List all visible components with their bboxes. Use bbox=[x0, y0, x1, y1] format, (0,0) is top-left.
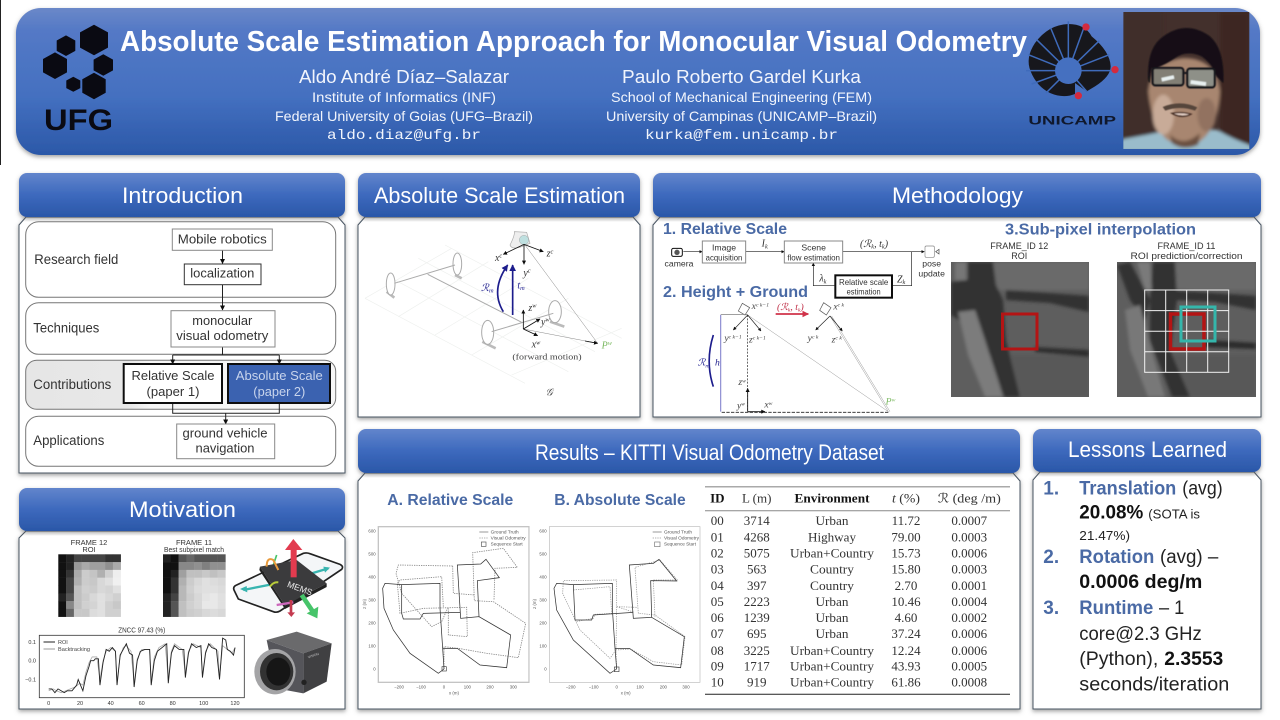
table: KITTI sequences: 4268 bbox=[744, 530, 770, 544]
diagram: vehicle and camera geometry: y bbox=[523, 268, 528, 279]
table: KITTI sequences: 11.72 bbox=[892, 513, 920, 528]
chart: absolute scale trajectory: 0 bbox=[544, 667, 547, 672]
line chart: ZNCC: 100 bbox=[199, 701, 208, 707]
flow diagram: relative scale pipeline: Z bbox=[897, 274, 903, 285]
flow diagram: relative scale pipeline: Scene bbox=[801, 242, 826, 252]
image: frame 12 ROI: ROI bbox=[82, 545, 96, 554]
chart: absolute scale trajectory: 500 bbox=[539, 552, 547, 557]
image: frame 12 ROI with red box bbox=[951, 241, 1089, 397]
table: KITTI sequences: 07 bbox=[711, 626, 724, 641]
icon: industrial camera bbox=[254, 632, 332, 694]
flow diagram: relative scale pipeline: ) bbox=[884, 239, 889, 250]
table: KITTI sequences: 695 bbox=[747, 626, 766, 641]
diagram: vehicle and camera geometry: c bbox=[551, 248, 554, 255]
flow diagram: relative scale pipeline: acquisition bbox=[706, 252, 742, 262]
line chart: ZNCC: 80 bbox=[170, 701, 176, 707]
diagram: vehicle and camera geometry: P bbox=[602, 340, 608, 351]
line chart: ZNCC: 60 bbox=[139, 701, 145, 707]
chart: relative scale trajectory: 300 bbox=[510, 684, 518, 689]
chart: absolute scale trajectory bbox=[532, 527, 700, 695]
heading: introduction bbox=[19, 173, 345, 217]
table: KITTI sequences: 5075 bbox=[744, 546, 770, 560]
table: KITTI sequences: 12.24 bbox=[891, 643, 921, 658]
table: KITTI sequences: 0.0006 bbox=[951, 626, 988, 641]
chart: relative scale trajectory: −100 bbox=[416, 684, 426, 689]
author block: Aldo: aldo.diaz@ufg.br bbox=[327, 128, 481, 144]
list item: runtime: – 1 bbox=[1159, 598, 1184, 619]
table: KITTI sequences: 37.24 bbox=[891, 626, 921, 641]
diagram: camera height over ground: c k bbox=[838, 303, 845, 309]
flow diagram: relative scale pipeline bbox=[665, 239, 945, 298]
heading: introduction: Introduction bbox=[122, 183, 243, 208]
table: KITTI sequences: 2.70 bbox=[895, 578, 917, 593]
chart: relative scale trajectory: Visual Odometry bbox=[491, 535, 527, 540]
author block: Aldo bbox=[275, 67, 533, 144]
table: KITTI sequences: 0.0008 bbox=[951, 674, 987, 690]
diagram: vehicle and camera geometry: m bbox=[520, 285, 525, 292]
table: KITTI sequences: 03 bbox=[711, 562, 724, 576]
subheading: absolute scale plot: B. Absolute Scale bbox=[554, 492, 686, 509]
image: frame 12 ROI with red box: FRAME_ID 12 bbox=[990, 241, 1048, 251]
line chart: ZNCC: −0.1 bbox=[25, 678, 36, 684]
list item: translation bbox=[1043, 478, 1223, 543]
diagram: camera height over ground: w bbox=[892, 398, 896, 404]
flow diagram: relative scale pipeline: (ℛ bbox=[860, 239, 871, 250]
line chart: ZNCC: 120 bbox=[230, 701, 240, 707]
icon: MEMS sensor on phone bbox=[234, 539, 343, 618]
flow diagram: research overview: Applications bbox=[33, 433, 105, 448]
chart: relative scale trajectory: 200 bbox=[486, 684, 494, 689]
subheading: sub-pixel interpolation: 3.Sub-pixel interpolation bbox=[1005, 221, 1196, 238]
table: KITTI sequences: 2223 bbox=[744, 594, 770, 609]
table: KITTI sequences bbox=[705, 487, 1010, 694]
flow diagram: research overview: Relative Scale bbox=[132, 368, 214, 383]
flow diagram: relative scale pipeline: k bbox=[882, 244, 885, 251]
diagram: camera height over ground: P bbox=[886, 396, 892, 407]
subheading: relative scale: 1. Relative Scale bbox=[663, 221, 787, 238]
flow diagram: relative scale pipeline: , t bbox=[874, 239, 882, 250]
diagram: camera height over ground bbox=[698, 301, 896, 412]
speaker photo bbox=[1120, 12, 1253, 151]
flow diagram: relative scale pipeline: Relative scale bbox=[839, 277, 888, 287]
icon: MEMS sensor on phone: MEMS bbox=[286, 579, 314, 598]
panel: results bbox=[358, 429, 1020, 709]
diagram: vehicle and camera geometry: t bbox=[517, 280, 520, 291]
line chart: ZNCC: 20 bbox=[77, 701, 83, 707]
logo: UNICAMP: UNICAMP bbox=[1028, 114, 1116, 128]
diagram: vehicle and camera geometry: z bbox=[528, 303, 532, 314]
table: KITTI sequences: 02 bbox=[711, 546, 724, 560]
panel: methodology bbox=[653, 173, 1261, 417]
chart: absolute scale trajectory: 600 bbox=[539, 529, 547, 534]
image: frame 11 best match: Best subpixel match bbox=[164, 545, 224, 554]
table: KITTI sequences: 3714 bbox=[744, 513, 770, 528]
table: KITTI sequences: 00 bbox=[711, 513, 724, 528]
table: KITTI sequences: 4.60 bbox=[895, 610, 917, 625]
list item: rotation bbox=[1043, 547, 1219, 593]
list item: runtime: 2.3553 bbox=[1164, 649, 1223, 670]
table: KITTI sequences: 1239 bbox=[744, 610, 770, 625]
heading: methodology bbox=[653, 173, 1261, 217]
table: KITTI sequences: 0.0003 bbox=[951, 562, 987, 576]
flow diagram: relative scale pipeline: k bbox=[824, 278, 827, 285]
title: Absolute Scale Estimation Approach for Monocular Visual Odometry bbox=[120, 26, 1027, 58]
diagram: camera height over ground: x bbox=[764, 400, 769, 411]
heading: results bbox=[358, 429, 1020, 473]
line chart: ZNCC: ZNCC 97.43 (%) bbox=[118, 627, 165, 634]
logo: UFG bbox=[43, 25, 113, 137]
table: KITTI sequences: Highway bbox=[808, 530, 856, 544]
table: KITTI sequences: ℛ (deg /m) bbox=[938, 490, 1001, 506]
table: KITTI sequences: 15.80 bbox=[891, 562, 921, 576]
flow diagram: relative scale pipeline: update bbox=[918, 268, 945, 278]
table: KITTI sequences: 0.0006 bbox=[951, 643, 988, 658]
flow diagram: relative scale pipeline: λ bbox=[819, 274, 824, 285]
flow diagram: relative scale pipeline: k bbox=[871, 244, 874, 251]
table: KITTI sequences: 563 bbox=[747, 562, 766, 576]
image: frame 11 ROI prediction with grid: FRAME_ID 11 bbox=[1158, 241, 1216, 251]
chart: relative scale trajectory: 0 bbox=[443, 684, 446, 689]
icon: industrial camera: VISION bbox=[307, 652, 320, 659]
diagram: vehicle and camera geometry: ℛ bbox=[481, 283, 489, 294]
chart: absolute scale trajectory: 0 bbox=[615, 684, 618, 689]
flow diagram: research overview: Research field bbox=[34, 252, 118, 267]
list item: translation: 21.47%) bbox=[1079, 528, 1130, 543]
table: KITTI sequences: 0.0005 bbox=[951, 658, 987, 674]
heading: motivation: Motivation bbox=[129, 497, 236, 522]
heading: methodology: Methodology bbox=[892, 183, 1023, 208]
diagram: camera height over ground: ) bbox=[799, 302, 804, 313]
flow diagram: relative scale pipeline: k bbox=[903, 279, 906, 286]
chart: relative scale trajectory: 200 bbox=[368, 620, 376, 625]
table: KITTI sequences: 0.0002 bbox=[951, 610, 987, 625]
heading: lessons learned bbox=[1033, 429, 1261, 472]
logo: UFG: UFG bbox=[44, 104, 113, 137]
panel: motivation bbox=[19, 488, 345, 709]
chart: absolute scale trajectory: 100 bbox=[539, 643, 547, 648]
diagram: camera height over ground: y bbox=[724, 333, 729, 344]
diagram: vehicle and camera geometry: w bbox=[536, 339, 541, 346]
table: KITTI sequences: 1717 bbox=[744, 658, 770, 674]
chart: relative scale trajectory: z (m) bbox=[362, 599, 367, 609]
chart: absolute scale trajectory: Sequence Start bbox=[664, 541, 697, 546]
chart: absolute scale trajectory: −100 bbox=[589, 684, 599, 689]
flow diagram: relative scale pipeline: flow estimation bbox=[787, 252, 840, 262]
table: KITTI sequences: 15.73 bbox=[891, 546, 921, 560]
table: KITTI sequences: Urban+Country bbox=[790, 674, 875, 690]
table: KITTI sequences: Urban+Country bbox=[790, 658, 875, 674]
diagram: vehicle and camera geometry bbox=[365, 232, 622, 399]
list item: translation: 1. bbox=[1043, 478, 1059, 499]
list item: rotation: (avg) – bbox=[1160, 547, 1219, 568]
list item: rotation: 0.0006 deg/m bbox=[1079, 572, 1202, 593]
diagram: camera height over ground: c k bbox=[835, 336, 842, 342]
list item: runtime: 3. bbox=[1043, 598, 1059, 619]
table: KITTI sequences: 0.0004 bbox=[951, 594, 988, 609]
flow diagram: relative scale pipeline: k bbox=[765, 243, 768, 250]
heading: absolute scale estimation bbox=[358, 173, 640, 217]
image: frame 11 ROI prediction with grid bbox=[1117, 241, 1256, 397]
chart: absolute scale trajectory: Visual Odometry bbox=[664, 535, 700, 540]
flow diagram: relative scale pipeline: camera bbox=[665, 258, 694, 268]
table: KITTI sequences: 919 bbox=[747, 674, 766, 690]
header banner bbox=[16, 8, 1260, 155]
table: KITTI sequences: Urban bbox=[816, 513, 849, 528]
list item: runtime: Runtime bbox=[1079, 598, 1153, 619]
diagram: vehicle and camera geometry: z bbox=[547, 249, 551, 260]
chart: absolute scale trajectory: 400 bbox=[539, 575, 547, 580]
heading: motivation bbox=[19, 488, 345, 531]
line chart: ZNCC: Backtracking bbox=[58, 647, 90, 653]
table: KITTI sequences: Country bbox=[810, 562, 855, 576]
table: KITTI sequences: Country bbox=[810, 578, 855, 593]
diagram: camera height over ground: z bbox=[749, 334, 753, 345]
line chart: ZNCC: 0.0 bbox=[28, 659, 36, 665]
diagram: camera height over ground: c k−1 bbox=[729, 334, 742, 340]
diagram: vehicle and camera geometry: m bbox=[489, 288, 494, 295]
chart: absolute scale trajectory: 200 bbox=[539, 620, 547, 625]
diagram: vehicle and camera geometry: y bbox=[541, 317, 545, 328]
chart: absolute scale trajectory: −200 bbox=[566, 684, 576, 689]
table: KITTI sequences: 09 bbox=[711, 658, 724, 674]
chart: relative scale trajectory: 500 bbox=[368, 552, 376, 557]
diagram: camera height over ground: w bbox=[742, 378, 746, 384]
flow diagram: research overview: Mobile robotics bbox=[178, 231, 267, 246]
diagram: vehicle and camera geometry: x bbox=[532, 340, 536, 351]
diagram: camera height over ground: k bbox=[798, 308, 801, 314]
diagram: camera height over ground: x bbox=[752, 301, 756, 312]
panel: absolute scale estimation bbox=[358, 173, 640, 417]
diagram: camera height over ground: c k−1 bbox=[756, 302, 769, 308]
chart: relative scale trajectory: 400 bbox=[368, 575, 376, 580]
chart: relative scale trajectory: −200 bbox=[394, 684, 404, 689]
flow diagram: research overview: visual odometry bbox=[176, 328, 269, 343]
diagram: camera height over ground: y bbox=[808, 333, 812, 344]
table: KITTI sequences: 0.0001 bbox=[951, 578, 987, 593]
image: frame 11 best match bbox=[163, 538, 226, 617]
image: frame 12 ROI: FRAME 12 bbox=[71, 538, 107, 547]
table: KITTI sequences: 10 bbox=[711, 674, 724, 690]
diagram: camera height over ground: w bbox=[741, 402, 745, 408]
chart: absolute scale trajectory: 100 bbox=[636, 684, 644, 689]
author block: Paulo bbox=[606, 67, 877, 144]
list item: translation: (avg) bbox=[1182, 478, 1223, 499]
flow diagram: research overview: (paper 2) bbox=[253, 384, 305, 399]
chart: absolute scale trajectory: 300 bbox=[682, 684, 690, 689]
table: KITTI sequences: 0.0006 bbox=[951, 546, 988, 560]
flow diagram: relative scale pipeline: Image bbox=[712, 242, 736, 252]
table: KITTI sequences: 04 bbox=[711, 578, 724, 593]
heading: lessons learned: Lessons Learned bbox=[1068, 437, 1227, 462]
image: frame 11 best match: FRAME 11 bbox=[176, 538, 212, 547]
diagram: camera height over ground: z bbox=[738, 377, 742, 388]
diagram: camera height over ground: h bbox=[715, 358, 720, 369]
logo: UNICAMP bbox=[1026, 21, 1119, 128]
table: KITTI sequences: 61.86 bbox=[891, 674, 921, 690]
diagram: camera height over ground: x bbox=[833, 301, 838, 312]
table: KITTI sequences: Environment bbox=[794, 490, 870, 506]
diagram: vehicle and camera geometry: w bbox=[545, 317, 550, 324]
list item: runtime: (Python), bbox=[1079, 649, 1158, 670]
subheading: relative scale plot: A. Relative Scale bbox=[387, 492, 513, 509]
diagram: camera height over ground: ℛ bbox=[698, 358, 705, 369]
table: KITTI sequences: 397 bbox=[747, 578, 767, 593]
flow diagram: relative scale pipeline: estimation bbox=[847, 287, 881, 297]
author block: Aldo: Federal University of Goias (UFG–Brazil) bbox=[275, 108, 533, 124]
diagram: camera height over ground: (ℛ bbox=[777, 302, 788, 313]
image: frame 11 ROI prediction with grid: ROI prediction/correction bbox=[1130, 251, 1242, 261]
diagram: camera height over ground: k bbox=[788, 308, 791, 314]
table: KITTI sequences: L (m) bbox=[742, 490, 771, 506]
diagram: vehicle and camera geometry: (forward motion) bbox=[512, 352, 582, 361]
table: KITTI sequences: 08 bbox=[711, 643, 724, 658]
table: KITTI sequences: Urban bbox=[816, 594, 849, 609]
chart: relative scale trajectory: 100 bbox=[368, 643, 376, 648]
flow diagram: research overview: ground vehicle bbox=[182, 425, 268, 440]
line chart: ZNCC: 40 bbox=[108, 701, 114, 707]
heading: absolute scale estimation: Absolute Scale Estimation bbox=[374, 183, 625, 208]
table: KITTI sequences: 0.0003 bbox=[951, 530, 987, 544]
diagram: camera height over ground: c k−1 bbox=[753, 336, 766, 342]
chart: absolute scale trajectory: 200 bbox=[660, 684, 668, 689]
list item: rotation: Rotation bbox=[1079, 547, 1154, 568]
chart: relative scale trajectory: 100 bbox=[464, 684, 472, 689]
list item: translation: (SOTA is bbox=[1148, 506, 1201, 521]
flow diagram: research overview: Contributions bbox=[33, 377, 112, 392]
table: KITTI sequences: 43.93 bbox=[891, 658, 921, 674]
image: frame 12 ROI bbox=[58, 538, 121, 617]
author block: Paulo: kurka@fem.unicamp.br bbox=[645, 128, 838, 144]
table: KITTI sequences: ID bbox=[710, 490, 725, 506]
diagram: camera height over ground: c k bbox=[812, 334, 819, 340]
chart: absolute scale trajectory: Ground Truth bbox=[664, 529, 693, 534]
line chart: ZNCC bbox=[25, 627, 244, 707]
flow diagram: research overview bbox=[26, 222, 336, 466]
flow diagram: research overview: (paper 1) bbox=[146, 384, 200, 399]
chart: relative scale trajectory: 300 bbox=[368, 598, 376, 603]
table: KITTI sequences: Urban bbox=[816, 610, 849, 625]
diagram: vehicle and camera geometry: 𝒢 bbox=[546, 388, 555, 399]
diagram: camera height over ground: z bbox=[832, 334, 835, 345]
diagram: camera height over ground: m bbox=[705, 363, 709, 369]
chart: absolute scale trajectory: x (m) bbox=[621, 690, 631, 695]
image: frame 12 ROI with red box: ROI bbox=[1011, 251, 1027, 261]
table: KITTI sequences: 79.00 bbox=[891, 530, 921, 544]
diagram: vehicle and camera geometry: w bbox=[532, 303, 537, 310]
table: KITTI sequences: 01 bbox=[711, 530, 724, 544]
diagram: vehicle and camera geometry: c bbox=[499, 253, 502, 260]
table: KITTI sequences: 05 bbox=[711, 594, 724, 609]
diagram: vehicle and camera geometry: x bbox=[495, 253, 499, 264]
author block: Aldo: Institute of Informatics (INF) bbox=[312, 89, 496, 105]
table: KITTI sequences: 0.0007 bbox=[951, 513, 988, 528]
table: KITTI sequences: 3225 bbox=[744, 643, 770, 658]
chart: relative scale trajectory bbox=[362, 527, 529, 695]
line chart: ZNCC: 0 bbox=[47, 701, 50, 707]
chart: relative scale trajectory: Sequence Start bbox=[491, 541, 524, 546]
diagram: camera height over ground: , t bbox=[790, 302, 798, 313]
author block: Aldo: Aldo André Díaz–Salazar bbox=[299, 67, 509, 87]
table: KITTI sequences: Urban bbox=[816, 626, 849, 641]
flow diagram: research overview: Absolute Scale bbox=[236, 368, 323, 383]
chart: relative scale trajectory: Ground Truth bbox=[491, 529, 519, 534]
table: KITTI sequences: Urban+Country bbox=[790, 643, 875, 658]
panel: introduction bbox=[19, 173, 345, 473]
diagram: camera height over ground: w bbox=[769, 401, 773, 407]
table: KITTI sequences: 10.46 bbox=[891, 594, 921, 609]
list item: translation: Translation bbox=[1079, 478, 1176, 499]
flow diagram: research overview: Techniques bbox=[33, 320, 100, 335]
chart: relative scale trajectory: x (m) bbox=[449, 690, 459, 695]
heading: results: Results – KITTI Visual Odometry Dataset bbox=[535, 440, 884, 465]
diagram: vehicle and camera geometry: c bbox=[528, 268, 531, 275]
author block: Paulo: University of Campinas (UNICAMP–Brazil) bbox=[606, 108, 877, 124]
chart: absolute scale trajectory: z (m) bbox=[532, 599, 537, 609]
diagram: camera height over ground: y bbox=[737, 400, 741, 411]
list item: rotation: 2. bbox=[1043, 547, 1059, 568]
table: KITTI sequences: Urban+Country bbox=[790, 546, 875, 560]
flow diagram: research overview: localization bbox=[190, 266, 254, 281]
author block: Paulo: Paulo Roberto Gardel Kurka bbox=[622, 67, 862, 87]
list item: runtime bbox=[1043, 598, 1229, 696]
author block: Paulo: School of Mechanical Engineering (FEM) bbox=[611, 89, 872, 105]
list item: runtime: core@2.3 GHz bbox=[1079, 624, 1202, 645]
chart: relative scale trajectory: 600 bbox=[368, 529, 376, 534]
panel: lessons learned bbox=[1033, 429, 1261, 709]
subheading: height plus ground: 2. Height + Ground bbox=[663, 284, 808, 301]
flow diagram: research overview: monocular bbox=[192, 313, 253, 328]
chart: relative scale trajectory: 0 bbox=[373, 667, 376, 672]
list item: translation: 20.08% bbox=[1079, 502, 1143, 523]
flow diagram: research overview: navigation bbox=[196, 440, 254, 455]
flow diagram: relative scale pipeline: I bbox=[762, 239, 765, 250]
diagram: vehicle and camera geometry: w bbox=[608, 340, 613, 347]
chart: absolute scale trajectory: 300 bbox=[539, 598, 547, 603]
table: KITTI sequences: t (%) bbox=[892, 490, 920, 506]
line chart: ZNCC: ROI bbox=[58, 640, 68, 646]
flow diagram: relative scale pipeline: pose bbox=[922, 259, 941, 269]
table: KITTI sequences: 06 bbox=[711, 610, 724, 625]
list item: runtime: seconds/iteration bbox=[1079, 675, 1229, 696]
line chart: ZNCC: 0.1 bbox=[28, 640, 36, 646]
